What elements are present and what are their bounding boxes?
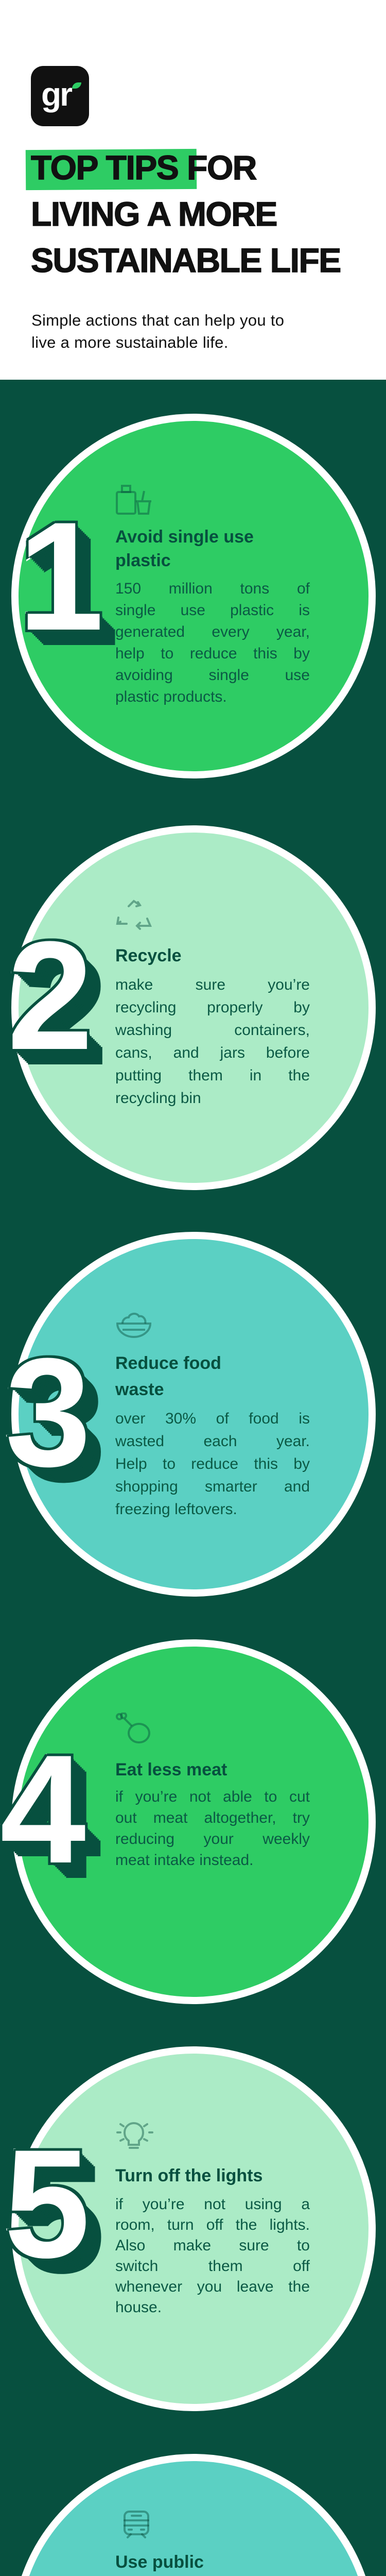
tip 5 body: room, turn off the lights. (115, 2216, 310, 2233)
subtitle (31, 311, 284, 351)
tip 4 body: if you’re not able to cut (115, 1788, 310, 1805)
title: LIVING A MORE (31, 195, 277, 233)
tip 5 body: whenever you leave the (115, 2278, 310, 2295)
tip 2 body: make sure you’re (115, 976, 310, 993)
icon: plastic (116, 485, 151, 515)
icon: light bulb (116, 2122, 153, 2149)
icon: train (124, 2511, 149, 2538)
tip 6 circle (11, 2454, 376, 2576)
tip 1 title (115, 527, 254, 570)
tip 3 title (115, 1353, 221, 1399)
tip 4 body: reducing your weekly (115, 1831, 310, 1848)
title: SUSTAINABLE LIFE (31, 241, 341, 279)
tip 3 body: wasted each year. (115, 1433, 310, 1450)
tip 2 body: recycling bin (115, 1090, 201, 1107)
tip 3 number: 3 (5, 1326, 91, 1499)
tip 3 title: waste (115, 1380, 164, 1399)
tip 1 circle (11, 414, 376, 778)
tip 3 body: freezing leftovers. (115, 1501, 237, 1518)
tip 2 body: cans, and jars before (115, 1044, 310, 1061)
icon: recycle (116, 900, 152, 930)
subtitle: Simple actions that can help you to (31, 311, 284, 329)
tip 3 circle (11, 1232, 376, 1597)
tip 3 body: over 30% of food is (115, 1410, 310, 1427)
tip 1 title: Avoid single use (115, 527, 254, 547)
tip 6 title: Use public (115, 2552, 204, 2572)
tip 2 title: Recycle (115, 946, 182, 965)
tip 3 body (115, 1410, 310, 1518)
tip 2 body (115, 976, 310, 1107)
title: TOP TIPS FOR (31, 148, 256, 187)
subtitle: live a more sustainable life. (31, 333, 229, 351)
tip 4 circle (11, 1639, 376, 2004)
tip 5 circle (11, 2046, 376, 2411)
tip 5 body: Also make sure to (115, 2237, 310, 2254)
tip 2 body: putting them in the (115, 1067, 310, 1084)
tip 5 title: Turn off the lights (115, 2166, 262, 2185)
icon: drumstick (116, 1713, 150, 1743)
tip 1 body: 150 million tons of (115, 580, 310, 597)
tip 5 number: 5 (4, 2117, 90, 2290)
tip 1 body: generated every year, (115, 623, 310, 640)
tip 1 body: avoiding single use (115, 667, 310, 684)
tip 2 number: 2 (7, 909, 93, 1082)
tip 5 body: house. (115, 2299, 162, 2316)
tip 2 body: recycling properly by (115, 999, 310, 1016)
tip 4 number: 4 (0, 1722, 86, 1895)
tip 1 title: plastic (115, 551, 171, 570)
tip 3 body: shopping smarter and (115, 1478, 310, 1495)
tip 3 title: Reduce food (115, 1353, 221, 1373)
tip 2 circle (11, 825, 376, 1190)
tip 5 body (115, 2196, 310, 2316)
tip 5 body: switch them off (115, 2258, 310, 2275)
tip 5 body: if you’re not using a (115, 2196, 310, 2213)
tip 1 body: single use plastic is (115, 602, 310, 619)
tip 4 body: meat intake instead. (115, 1852, 253, 1869)
logo: gr app icon: gr (41, 76, 71, 113)
tip 1 body: plastic products. (115, 688, 227, 705)
tip 1 number: 1 (18, 489, 104, 663)
tip 1 body (115, 580, 310, 705)
tip 1 body: help to reduce this by (115, 645, 310, 662)
tip 3 body: Help to reduce this by (115, 1455, 310, 1472)
tip 4 title: Eat less meat (115, 1760, 227, 1780)
tip 4 body (115, 1788, 310, 1869)
tip 4 body: out meat altogether, try (115, 1809, 310, 1826)
logo: gr app icon (31, 66, 89, 126)
title (31, 148, 341, 279)
icon: salad bowl (116, 1313, 151, 1338)
tip 2 body: washing containers, (115, 1022, 310, 1039)
title highlight (26, 149, 197, 190)
